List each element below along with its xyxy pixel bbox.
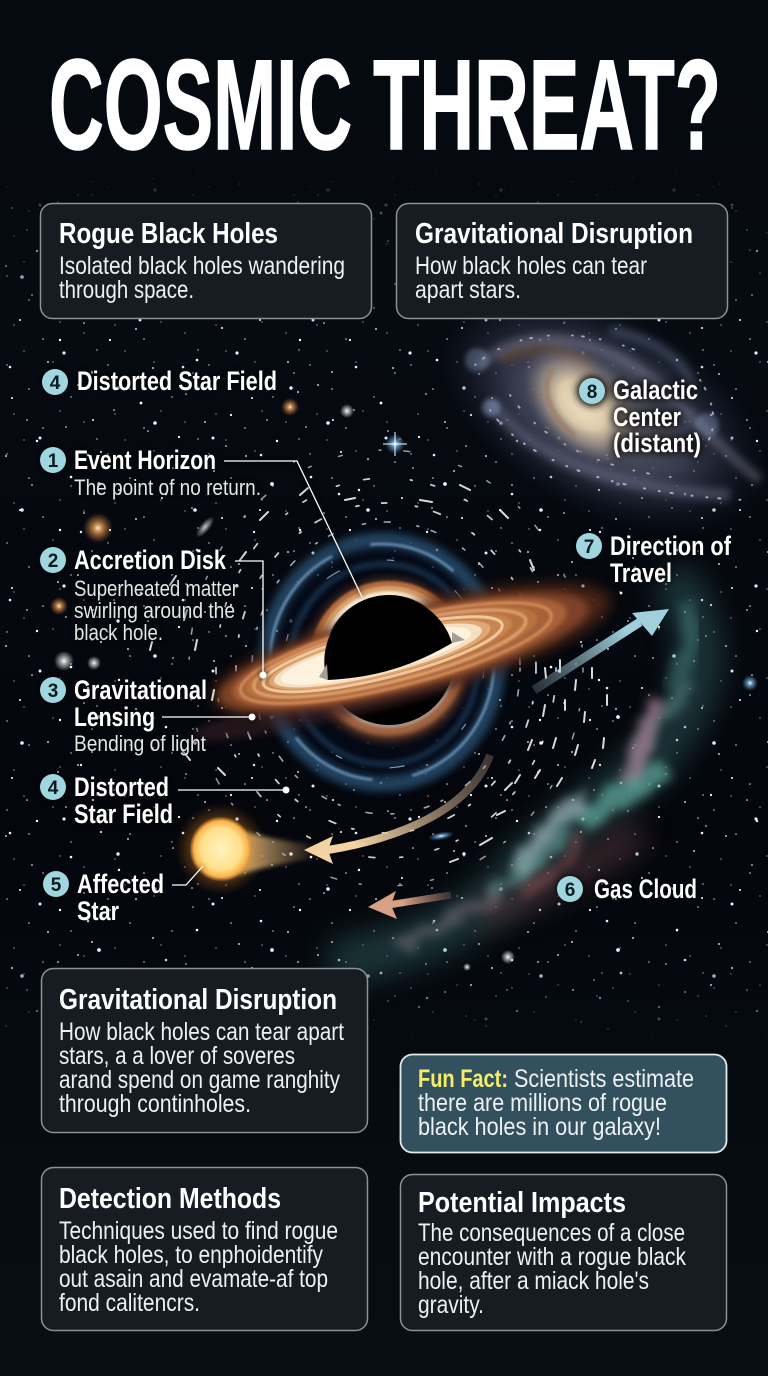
label: distorted star field: 4 (48, 778, 59, 799)
label: affected star: Star (77, 896, 119, 926)
panel: potential impacts (400, 1174, 726, 1330)
label: distorted star field top: Distorted Star Field (77, 366, 277, 396)
label: event horizon: Event Horizon (74, 445, 216, 475)
fun fact text (418, 1065, 694, 1141)
text block: How black holes can tear apart (59, 1018, 344, 1046)
text block: gravity. (418, 1291, 484, 1319)
text block: encounter with a rogue black (418, 1243, 686, 1271)
heading: Gravitational Disruption (415, 218, 693, 250)
text block: Techniques used to find rogue (59, 1217, 338, 1245)
label: affected star: Affected (77, 869, 164, 899)
label: gravitational lensing: Gravitational (74, 675, 207, 705)
label: event horizon (40, 445, 362, 597)
label: distorted star field top: 4 (50, 373, 61, 394)
heading: Detection Methods (59, 1183, 281, 1215)
fun fact text: there are millions of rogue (418, 1089, 667, 1117)
label: accretion disk: swirling around the (74, 598, 235, 623)
text block (59, 1018, 344, 1118)
text block: apart stars. (415, 276, 521, 304)
wedge highlights (452, 632, 465, 643)
distorted blue rings (189, 450, 583, 886)
label: direction of travel (576, 531, 732, 588)
heading: Gravitational Disruption (59, 984, 337, 1016)
label: event horizon: The point of no return. (74, 475, 261, 500)
text block (418, 1219, 686, 1319)
text block: stars, a a lover of soveres (59, 1042, 295, 1070)
label: direction of travel: Travel (610, 558, 672, 588)
fun fact text: Fun Fact: (418, 1065, 508, 1093)
label: gravitational lensing: 3 (48, 681, 58, 702)
text block: The consequences of a close (418, 1219, 685, 1247)
label: gas cloud (557, 874, 697, 904)
arrow: gas cloud drift (368, 891, 451, 919)
upper halo rings (313, 580, 444, 639)
star field (5, 172, 768, 1042)
label: direction of travel: 7 (584, 537, 594, 558)
galaxy (399, 240, 768, 584)
label: accretion disk: Accretion Disk (74, 545, 227, 575)
label: accretion disk: black hole. (74, 620, 163, 645)
text block: hole, after a miack hole's (418, 1267, 649, 1295)
black hole with accretion disk (172, 450, 622, 886)
text block: fond calitencrs. (59, 1289, 200, 1317)
label: gravitational lensing (40, 675, 256, 756)
text block: through continholes. (59, 1090, 251, 1118)
panel: gravitational disruption top (396, 204, 728, 318)
gas cloud (350, 590, 700, 960)
fun fact text: black holes in our galaxy! (418, 1113, 661, 1141)
panel: gravitational disruption bottom (42, 968, 368, 1132)
label: gas cloud: 6 (565, 880, 575, 901)
label: event horizon: 1 (48, 451, 59, 472)
panel: rogue black holes (40, 204, 372, 318)
label: distorted star field (40, 772, 290, 829)
label: galactic center: (distant) (613, 428, 701, 458)
arrow: direction of travel (534, 609, 669, 690)
arrow: star being pulled (304, 755, 490, 864)
streak stars (150, 485, 607, 862)
lower halo rings (307, 578, 471, 742)
label: galactic center (579, 375, 701, 458)
text block: arand spend on game ranghity (59, 1066, 340, 1094)
panel: detection methods (42, 1168, 368, 1330)
label: direction of travel: Direction of (610, 531, 732, 561)
affected star (175, 803, 325, 895)
label: galactic center: 8 (587, 382, 597, 403)
event horizon (324, 596, 452, 680)
heading: Potential Impacts (418, 1187, 626, 1219)
text block (59, 1217, 338, 1317)
text block: black holes, to enphoidentify (59, 1241, 323, 1269)
bright stars (50, 398, 758, 971)
label: affected star (43, 866, 203, 926)
panel: fun fact (400, 1054, 726, 1152)
label: galactic center: Center (613, 402, 681, 432)
label: accretion disk (40, 545, 266, 678)
label: affected star: 5 (51, 875, 62, 896)
label: galactic center: Galactic (613, 375, 698, 405)
text block: through space. (59, 276, 194, 304)
label: accretion disk: Superheated matter (74, 576, 238, 601)
label: distorted star field: Distorted (74, 772, 169, 802)
accretion disk (172, 557, 622, 755)
text block: How black holes can tear (415, 252, 647, 280)
lower shadow circle (324, 595, 454, 725)
label: gas cloud: Gas Cloud (594, 874, 697, 904)
text block (415, 252, 647, 304)
label: accretion disk: 2 (48, 551, 58, 572)
label: gravitational lensing: Lensing (74, 702, 155, 732)
text block: out asain and evamate-af top (59, 1265, 328, 1293)
heading: Rogue Black Holes (59, 218, 278, 250)
label: gravitational lensing: Bending of light (74, 731, 206, 756)
label: distorted star field: Star Field (74, 799, 173, 829)
text block (59, 252, 345, 304)
text block: Isolated black holes wandering (59, 252, 345, 280)
fun fact text: Scientists estimate (514, 1065, 694, 1093)
